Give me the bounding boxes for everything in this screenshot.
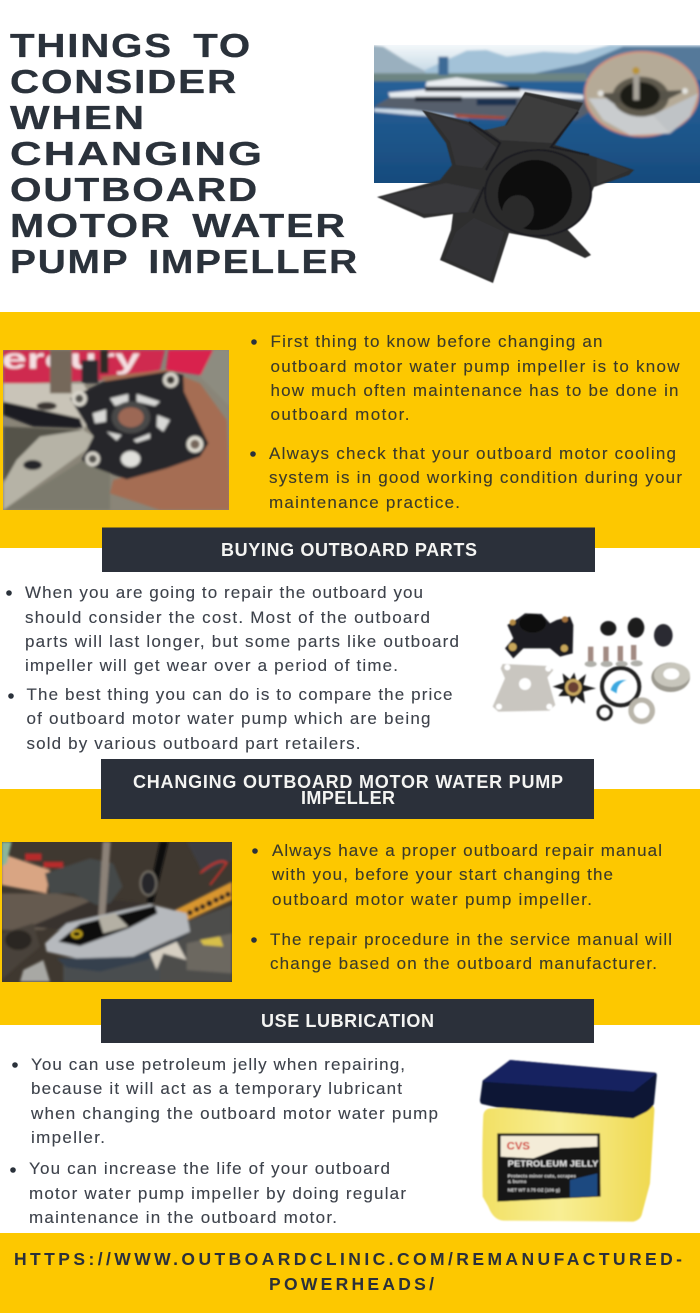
background: top white panel <box>0 0 700 312</box>
text block: section 3 bullets: change based on the outboard manufacturer. <box>270 954 657 973</box>
text block: section 3 bullets: Always have a proper outboard repair manual <box>272 841 662 860</box>
text block: section 1 bullets: outboard motor. <box>270 405 410 424</box>
panel: footer with url <box>0 1233 700 1313</box>
panel: footer with url: POWERHEADS/ <box>269 1274 434 1294</box>
text block: section 2 bullets <box>6 583 459 753</box>
text block: section 4 bullets: You can increase the life of your outboard <box>29 1159 390 1178</box>
text block: section 4 bullets: motor water pump impeller by doing regular <box>29 1184 406 1203</box>
text block: section 2 bullets: The best thing you can do is to compare the price <box>26 685 452 704</box>
title: WHEN <box>10 99 146 136</box>
text block: section 1 bullets <box>250 332 682 512</box>
banner: buying outboard parts: BUYING OUTBOARD PARTS <box>221 540 477 560</box>
text block: section 1 bullets: Always check that your outboard motor cooling <box>269 444 676 463</box>
title: CONSIDER <box>10 63 238 100</box>
title: PUMP IMPELLER <box>10 243 359 280</box>
text block: section 4 bullets: You can use petroleum jelly when repairing, <box>31 1055 405 1074</box>
photo: petroleum jelly jar <box>480 1060 657 1222</box>
banner: changing outboard motor water pump impeller: CHANGING OUTBOARD MOTOR WATER PUMP <box>133 772 563 792</box>
photo: gasket held in hand <box>2 343 230 510</box>
photo: water pump kit parts <box>493 613 690 721</box>
text block: section 3 bullets <box>251 841 672 973</box>
photo: petroleum jelly jar: & burns <box>508 1179 527 1185</box>
photo: petroleum jelly jar: NET WT 3.75 OZ (106 g) <box>508 1188 560 1193</box>
text block: section 3 bullets: outboard motor water pump impeller. <box>272 890 592 909</box>
text block: section 2 bullets: parts will last longer, but some parts like outboard <box>25 632 459 651</box>
title: THINGS TO <box>10 27 252 64</box>
photo: petroleum jelly jar: Protects minor cuts, scrapes <box>508 1174 576 1180</box>
text block: section 4 bullets: when changing the outboard motor water pump <box>30 1104 438 1123</box>
panel: yellow section 2 <box>0 789 700 1025</box>
hero image: yacht on the sea with inset pump <box>370 40 700 187</box>
text block: section 1 bullets: maintenance practice. <box>269 493 460 512</box>
text block: section 2 bullets: of outboard motor water pump which are being <box>26 709 431 728</box>
text block: section 2 bullets: impeller will get wear over a period of time. <box>25 656 398 675</box>
title: CHANGING <box>10 135 264 172</box>
title: OUTBOARD <box>10 171 259 208</box>
icon: black rubber impeller <box>377 92 634 283</box>
text block: section 4 bullets <box>10 1055 438 1227</box>
photo: gloved hand working on lower unit <box>1 842 232 982</box>
photo: petroleum jelly jar: PETROLEUM JELLY <box>508 1159 599 1169</box>
text block: section 3 bullets: The repair procedure in the service manual will <box>270 930 672 949</box>
text block: section 4 bullets: impeller. <box>31 1128 105 1147</box>
text block: section 1 bullets: how much often maintenance has to be done in <box>270 381 678 400</box>
banner: changing outboard motor water pump impeller <box>101 759 594 819</box>
banner: changing outboard motor water pump impeller: IMPELLER <box>301 788 395 808</box>
title: MOTOR WATER <box>10 207 347 244</box>
panel: footer with url: HTTPS://WWW.OUTBOARDCLINIC.COM/REMANUFACTURED- <box>14 1249 682 1269</box>
banner: use lubrication <box>101 999 594 1043</box>
photo: petroleum jelly jar: CVS <box>507 1140 530 1152</box>
text block: section 2 bullets: sold by various outboard part retailers. <box>26 734 360 753</box>
text block: section 2 bullets: When you are going to repair the outboard you <box>25 583 423 602</box>
text block: section 1 bullets: outboard motor water pump impeller is to know <box>270 357 680 376</box>
text block: section 1 bullets: First thing to know before changing an <box>270 332 602 351</box>
text block: section 2 bullets: should consider the cost. Most of the outboard <box>25 608 430 627</box>
title <box>10 27 359 280</box>
text block: section 1 bullets: system is in good working condition during your <box>269 468 682 487</box>
text block: section 3 bullets: with you, before your start changing the <box>271 865 613 884</box>
photo: gasket held in hand: ercury <box>2 343 140 375</box>
text block: section 4 bullets: because it will act as a temporary lubricant <box>31 1079 402 1098</box>
text block: section 4 bullets: maintenance in the outboard motor. <box>29 1208 337 1227</box>
banner: use lubrication: USE LUBRICATION <box>261 1011 434 1031</box>
panel: yellow section 1 <box>0 312 700 548</box>
banner: buying outboard parts <box>102 528 595 572</box>
